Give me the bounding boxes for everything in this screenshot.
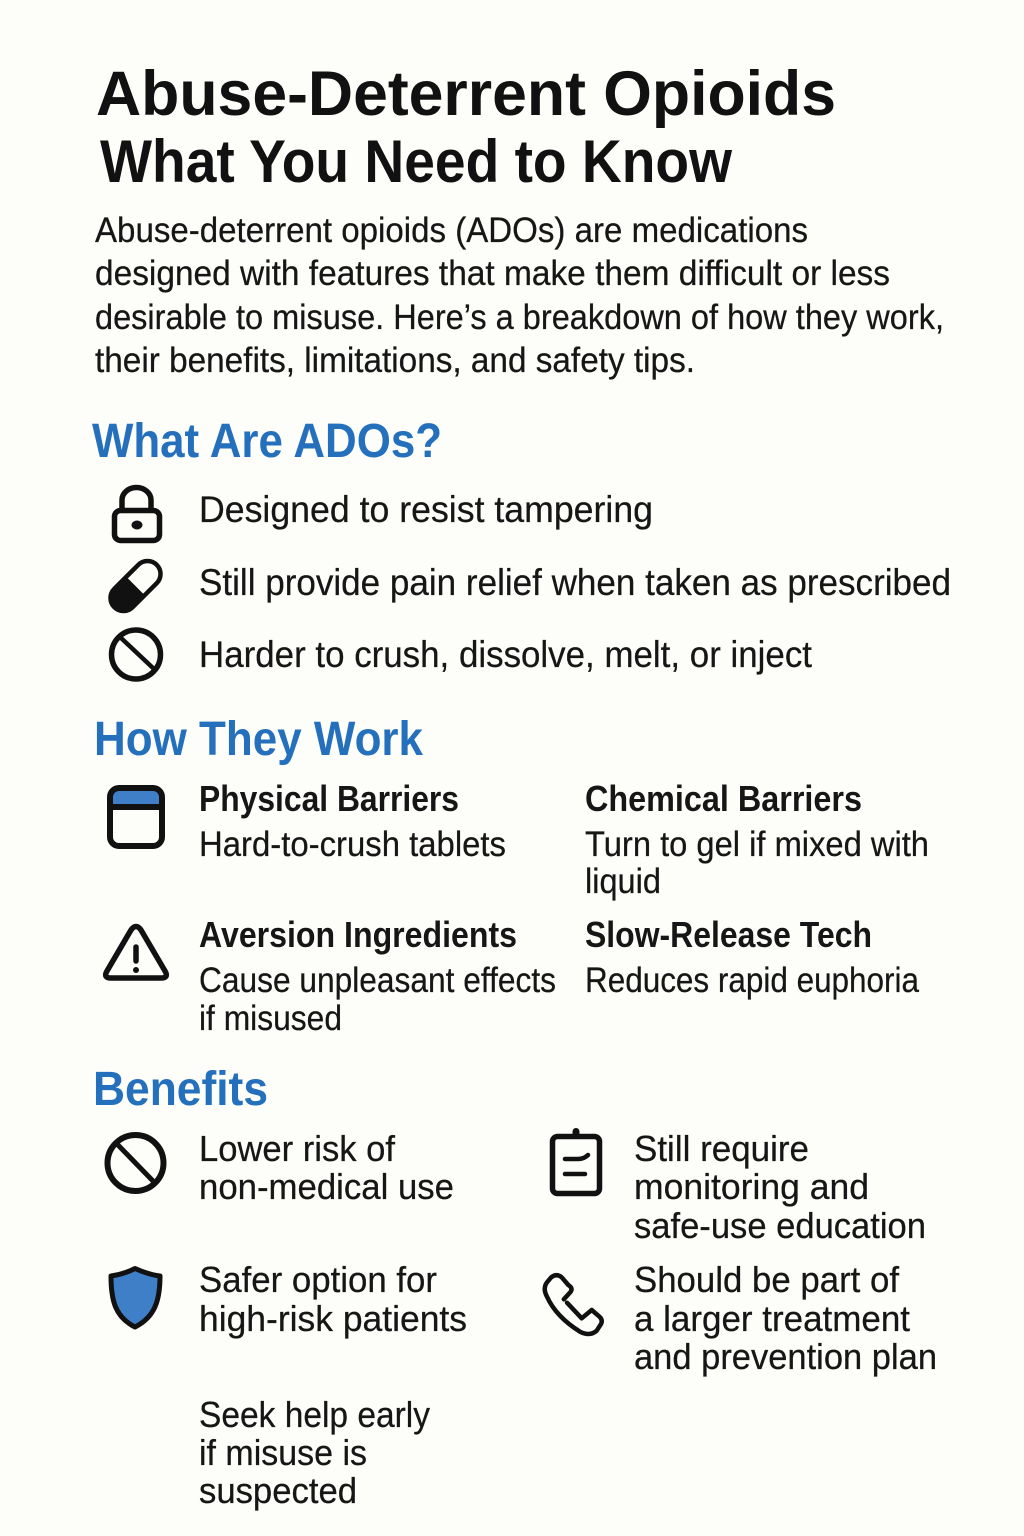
physical barriers: Physical Barriers xyxy=(199,778,459,819)
slow-release tech: Slow-Release Tech xyxy=(585,914,872,955)
icon: prohibition xyxy=(108,1135,164,1191)
title: Abuse-Deterrent Opioids xyxy=(96,59,836,129)
physical barriers xyxy=(199,778,506,864)
text: seek help: Seek help early xyxy=(199,1394,430,1435)
heading: What Are ADOs?: What Are ADOs? xyxy=(92,415,442,468)
icon: lock xyxy=(114,488,160,540)
intro text block xyxy=(95,211,944,380)
text: should be part: and prevention plan xyxy=(634,1336,937,1377)
panel: what are ADOs list xyxy=(102,488,951,679)
text: harder to crush: Harder to crush, dissolve, melt, or inject xyxy=(199,634,813,675)
intro text block: designed with features that make them difficult or less xyxy=(95,254,890,293)
text: should be part: Should be part of xyxy=(634,1259,900,1300)
text: lower risk xyxy=(199,1128,454,1207)
text: pain relief: Still provide pain relief when taken as prescribed xyxy=(199,562,951,603)
text: seek help: suspected xyxy=(199,1470,357,1511)
chemical barriers: liquid xyxy=(585,862,661,901)
aversion ingredients: if misused xyxy=(199,999,342,1038)
icon: shield xyxy=(111,1268,160,1327)
icon: prohibition xyxy=(112,630,160,679)
slow-release tech xyxy=(585,914,919,1000)
chemical barriers: Turn to gel if mixed with xyxy=(585,825,929,864)
title: What You Need to Know xyxy=(100,128,732,195)
text: resist tampering: Designed to resist tampering xyxy=(199,489,653,530)
text: seek help xyxy=(199,1394,430,1511)
chemical barriers: Chemical Barriers xyxy=(585,778,862,819)
icon: phone xyxy=(545,1275,602,1334)
text: should be part xyxy=(634,1259,937,1377)
text: should be part: a larger treatment xyxy=(634,1298,910,1339)
panel: benefits xyxy=(108,1128,937,1511)
text: safer option xyxy=(199,1259,467,1339)
text: safer option: Safer option for xyxy=(199,1259,437,1300)
icon: warning triangle xyxy=(106,926,166,978)
text: still require xyxy=(634,1128,926,1246)
text: still require: monitoring and xyxy=(634,1166,869,1207)
icon: clipboard xyxy=(552,1132,600,1194)
heading: How They Work: How They Work xyxy=(94,713,423,766)
intro text block: Abuse-deterrent opioids (ADOs) are medications xyxy=(95,211,808,250)
text: seek help: if misuse is xyxy=(199,1432,367,1473)
text: lower risk: non-medical use xyxy=(199,1166,454,1207)
text: safer option: high-risk patients xyxy=(199,1298,467,1339)
icon: tablet window xyxy=(110,788,162,846)
heading: Benefits: Benefits xyxy=(93,1063,268,1116)
intro text block: their benefits, limitations, and safety tips. xyxy=(95,341,695,380)
aversion ingredients xyxy=(199,914,556,1038)
physical barriers: Hard-to-crush tablets xyxy=(199,825,506,864)
title xyxy=(96,59,836,195)
text: still require: Still require xyxy=(634,1128,809,1169)
icon: pill xyxy=(102,554,167,619)
aversion ingredients: Cause unpleasant effects xyxy=(199,961,556,1000)
chemical barriers xyxy=(585,778,929,901)
text: still require: safe-use education xyxy=(634,1205,926,1246)
intro text block: desirable to misuse. Here’s a breakdown of how they work, xyxy=(95,298,944,337)
aversion ingredients: Aversion Ingredients xyxy=(199,914,517,955)
text: lower risk: Lower risk of xyxy=(199,1128,396,1169)
panel: how they work xyxy=(106,778,929,1038)
slow-release tech: Reduces rapid euphoria xyxy=(585,961,919,1000)
